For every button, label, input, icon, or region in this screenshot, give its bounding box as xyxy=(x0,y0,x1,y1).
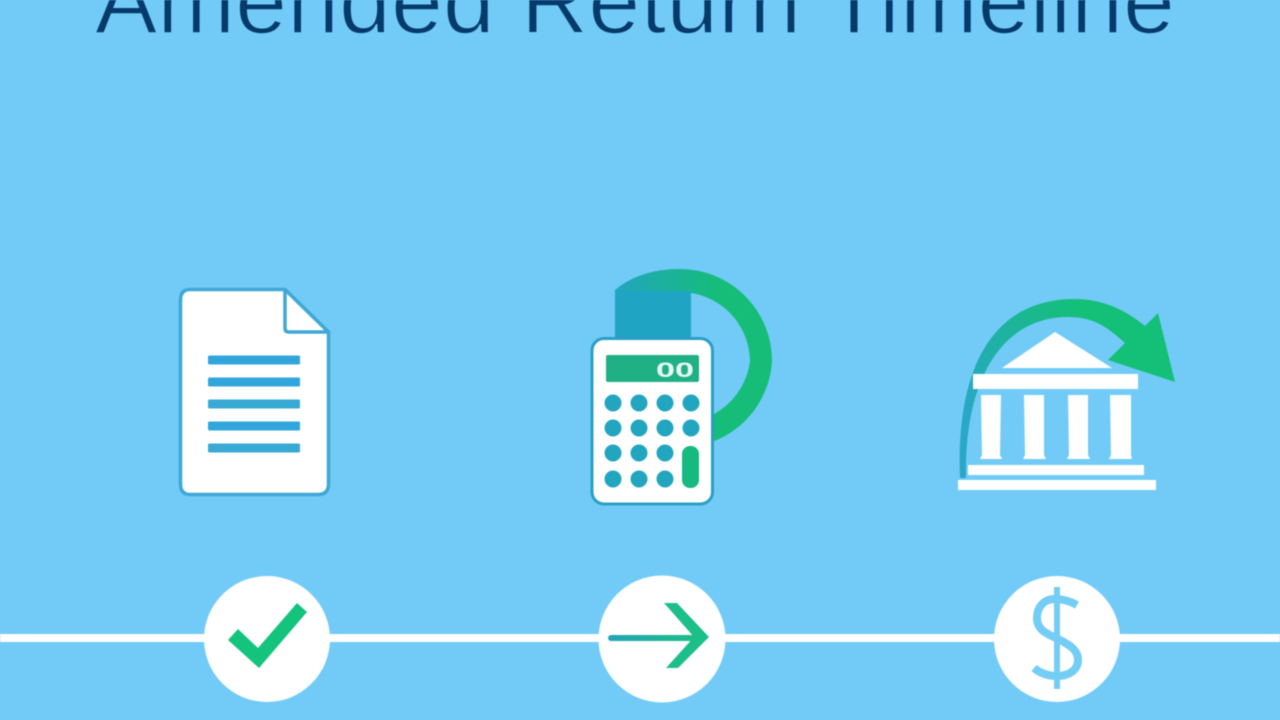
icon: calculator with circular arrow xyxy=(592,269,772,504)
bank roof xyxy=(1002,332,1112,368)
timeline node: arrow xyxy=(598,576,726,702)
calculator keys xyxy=(604,394,700,488)
timeline line xyxy=(0,634,1280,642)
bank columns xyxy=(980,395,1132,459)
equals key xyxy=(682,446,699,488)
screen digits: 00 xyxy=(656,359,694,382)
curved arrow xyxy=(960,299,1175,478)
calculator clip xyxy=(615,291,691,341)
circular arrow arc xyxy=(615,269,772,442)
calculator screen xyxy=(606,355,699,382)
timeline node: check xyxy=(204,576,330,702)
bank steps xyxy=(968,465,1144,475)
timeline node: dollar xyxy=(994,576,1120,702)
icon: bank with curved arrow xyxy=(958,299,1175,490)
icon: document xyxy=(180,290,328,494)
calculator body xyxy=(592,338,712,504)
bank entablature xyxy=(973,374,1138,389)
